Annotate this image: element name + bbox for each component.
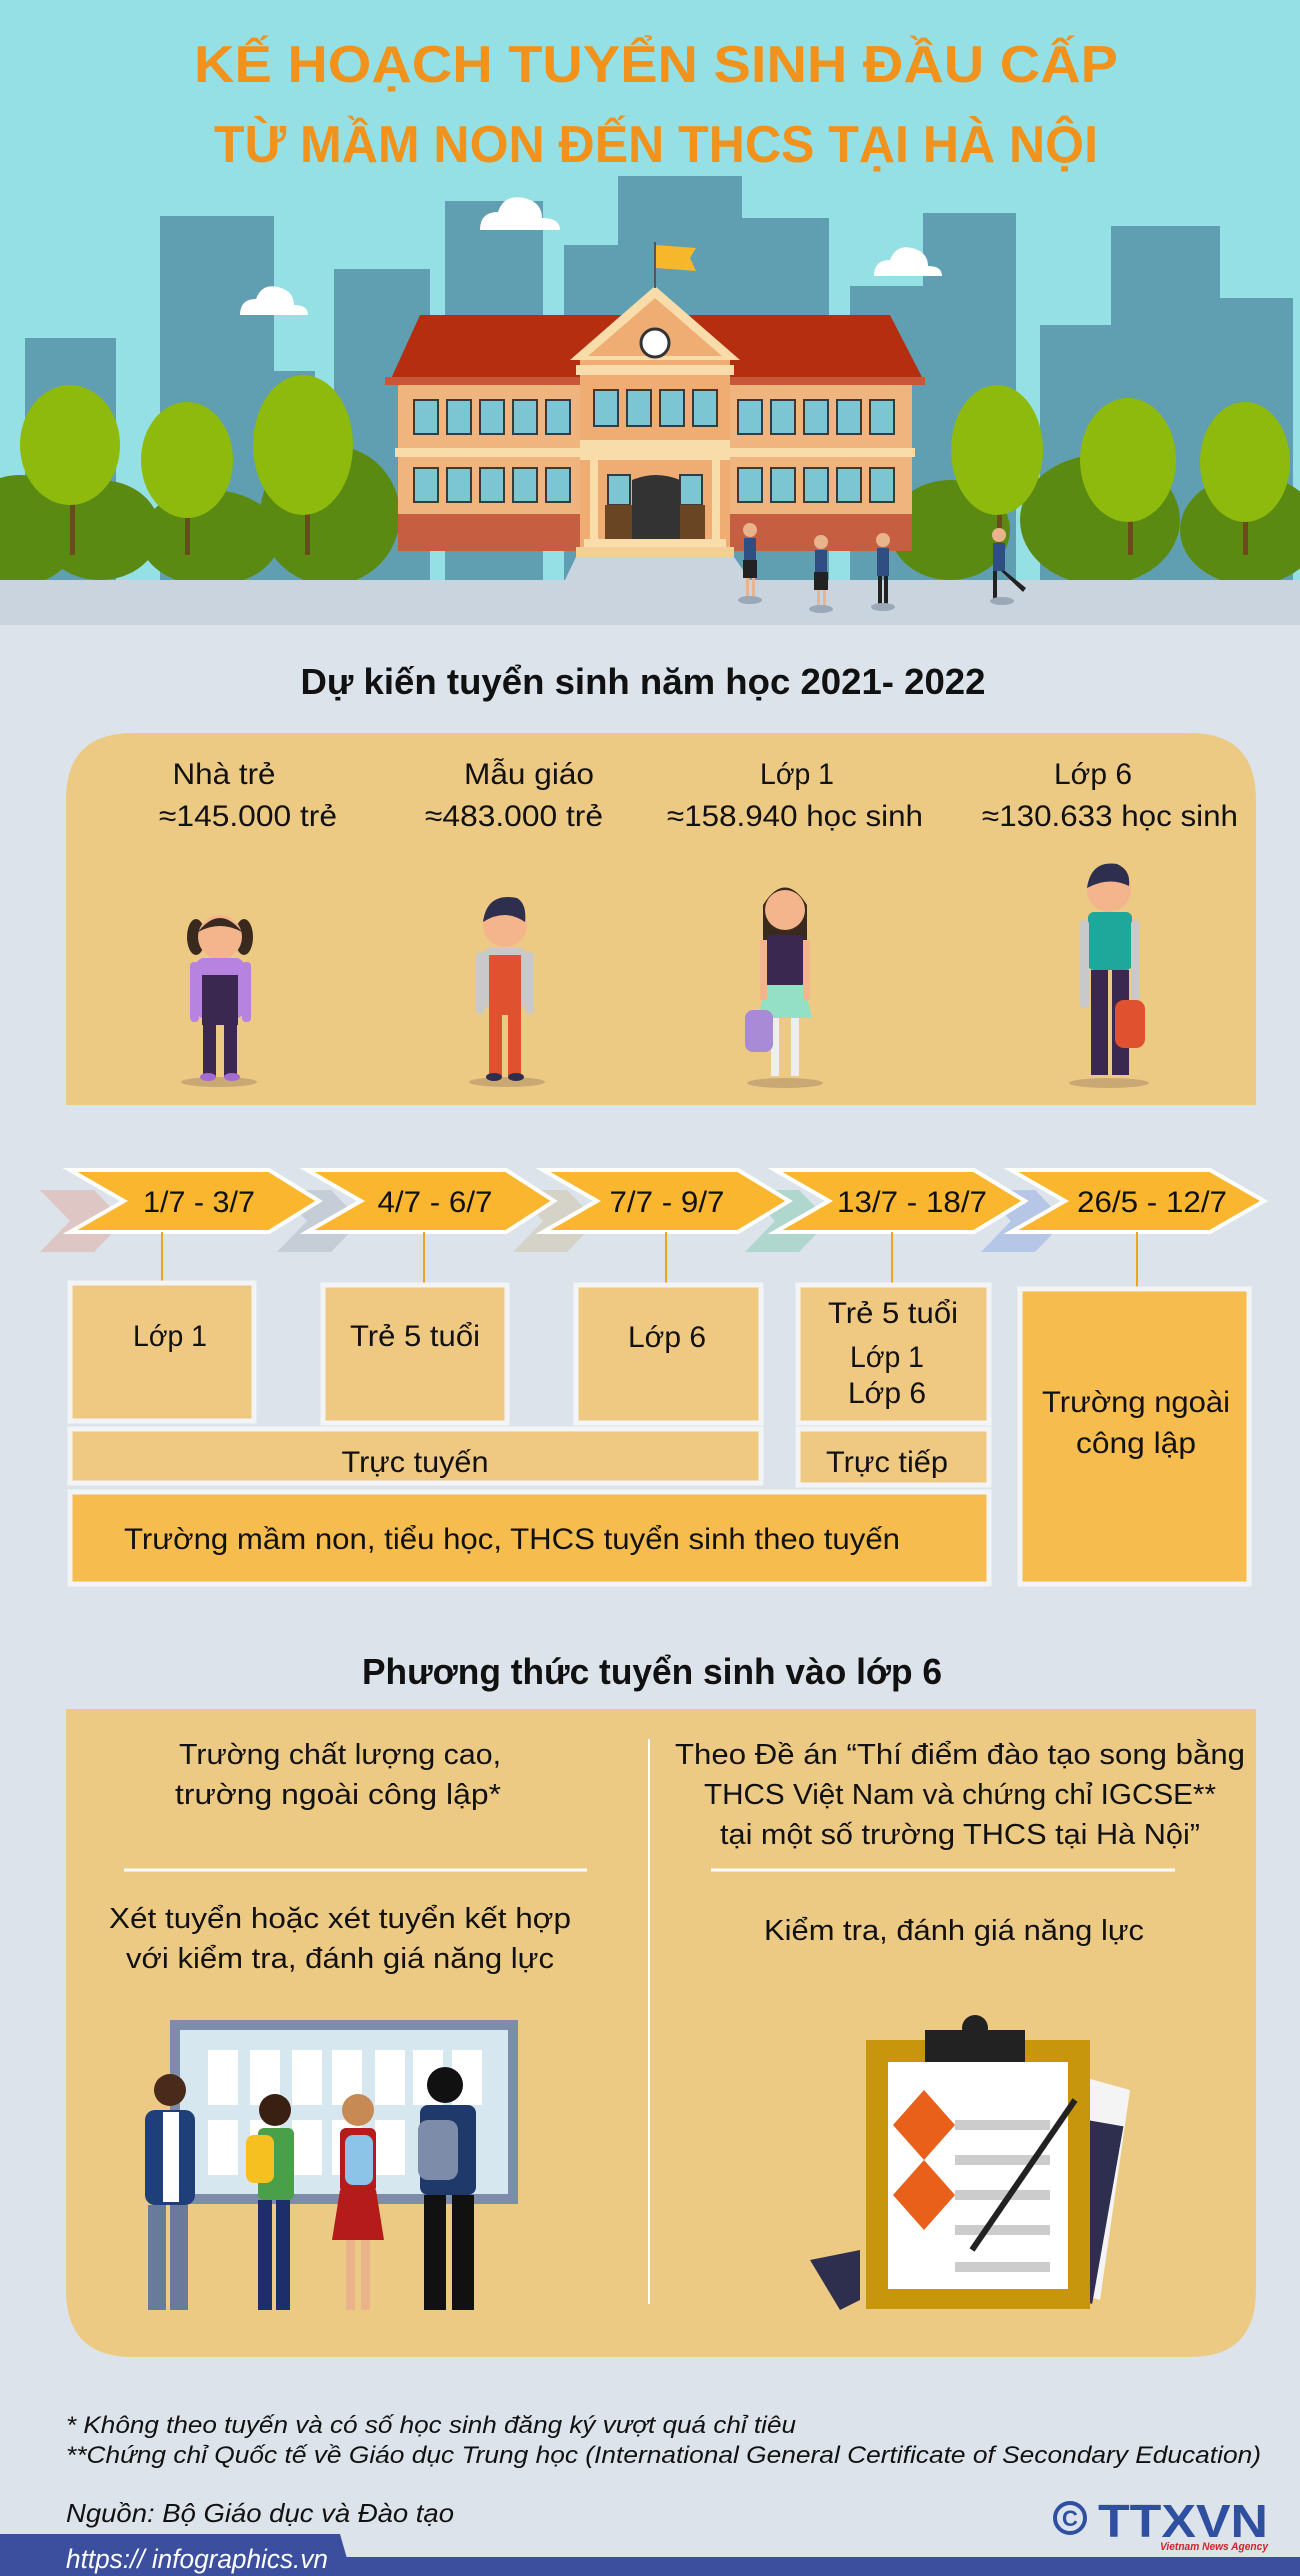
header scene — [0, 0, 1300, 625]
box labels: Lớp 6 — [848, 1377, 926, 1410]
trees right — [890, 385, 1300, 585]
column: Lớp 6: ≈130.633 học sinh — [982, 800, 1238, 833]
footer bar: https:// infographics.vn — [66, 2544, 328, 2574]
column: Lớp 6 — [982, 758, 1238, 833]
right column text: Theo Đề án “Thí điểm đào tạo song bằng — [675, 1738, 1245, 1771]
icon: toddler girl — [181, 915, 257, 1087]
icon: kindergarten boy — [469, 897, 545, 1087]
footnotes: **Chứng chỉ Quốc tế về Giáo dục Trung học (International General Certificate of Secondary Education) — [66, 2442, 1261, 2469]
box labels — [124, 1297, 1230, 1556]
date labels: 26/5 - 12/7 — [1077, 1186, 1227, 1219]
column: Mẫu giáo: ≈483.000 trẻ — [425, 800, 603, 833]
panel: admission methods — [66, 1709, 1256, 2357]
column: Lớp 6: Lớp 6 — [1054, 758, 1132, 791]
box labels: công lập — [1076, 1427, 1196, 1460]
right column text — [675, 1738, 1245, 1947]
small students — [738, 523, 1026, 613]
column: Nhà trẻ: Nhà trẻ — [172, 758, 276, 791]
heading: expected enrollment: Dự kiến tuyển sinh năm học 2021- 2022 — [300, 661, 986, 702]
trees left — [0, 375, 400, 586]
panel: enrollment figures — [66, 733, 1256, 1105]
clouds — [240, 197, 942, 315]
logo: TTXVN — [1055, 2495, 1269, 2553]
city buildings — [25, 176, 1293, 580]
box labels: Trẻ 5 tuổi — [350, 1320, 480, 1353]
schedule boxes — [70, 1283, 1249, 1584]
column: Lớp 1: ≈158.940 học sinh — [667, 800, 923, 833]
box labels: Trực tiếp — [826, 1446, 948, 1479]
icon: teenage boy — [1069, 864, 1149, 1088]
left column text: trường ngoài công lập* — [175, 1779, 501, 1811]
left column text — [109, 1739, 587, 1975]
illustration: clipboard test — [810, 2015, 1130, 2310]
illustration: students at notice board — [145, 2020, 518, 2310]
column: Mẫu giáo — [425, 758, 603, 833]
date labels — [143, 1186, 1227, 1219]
column: Lớp 1 — [667, 758, 923, 833]
title: KẾ HOẠCH TUYỂN SINH ĐẦU CẤP — [194, 35, 1118, 94]
left column text: Trường chất lượng cao, — [179, 1739, 501, 1771]
box labels: Lớp 1 — [133, 1320, 207, 1353]
box labels: Trẻ 5 tuổi — [828, 1297, 958, 1330]
box labels: Trực tuyến — [342, 1446, 488, 1479]
footnotes: * Không theo tuyến và có số học sinh đăng ký vượt quá chỉ tiêu — [66, 2412, 796, 2439]
title — [194, 35, 1118, 174]
column: Lớp 1: Lớp 1 — [760, 758, 834, 791]
right column text: tại một số trường THCS tại Hà Nội” — [720, 1819, 1200, 1851]
source: Nguồn: Bộ Giáo dục và Đào tạo — [66, 2498, 454, 2528]
icon: schoolgirl — [745, 888, 823, 1088]
column: Nhà trẻ: ≈145.000 trẻ — [159, 800, 337, 833]
date labels: 1/7 - 3/7 — [143, 1186, 255, 1219]
column: Mẫu giáo: Mẫu giáo — [464, 758, 594, 791]
right column text: THCS Việt Nam và chứng chỉ IGCSE** — [704, 1779, 1216, 1811]
ground — [0, 580, 1300, 625]
date labels: 4/7 - 6/7 — [378, 1186, 492, 1219]
logo: TTXVN: TTXVN — [1098, 2495, 1268, 2547]
column: Nhà trẻ — [159, 758, 337, 833]
footer bar — [0, 2534, 1300, 2576]
logo: TTXVN: Vietnam News Agency — [1160, 2541, 1269, 2553]
connector lines — [162, 1232, 1137, 1287]
date labels: 7/7 - 9/7 — [610, 1186, 724, 1219]
right column text: Kiểm tra, đánh giá năng lực — [764, 1915, 1144, 1947]
box labels: Lớp 6 — [628, 1321, 706, 1354]
left column text: với kiểm tra, đánh giá năng lực — [126, 1943, 554, 1975]
box labels: Trường mầm non, tiểu học, THCS tuyển sinh theo tuyến — [124, 1523, 900, 1556]
date labels: 13/7 - 18/7 — [837, 1186, 987, 1219]
footnotes — [66, 2412, 1261, 2469]
timeline arrows — [40, 1170, 1264, 1287]
box labels: Lớp 1 — [850, 1341, 924, 1374]
box labels: Trường ngoài — [1042, 1386, 1230, 1419]
heading: grade 6 admission methods: Phương thức tuyển sinh vào lớp 6 — [362, 1651, 942, 1692]
school building — [385, 242, 925, 557]
logo: TTXVN: C — [1062, 2506, 1078, 2531]
left column text: Xét tuyển hoặc xét tuyển kết hợp — [109, 1903, 571, 1935]
title: TỪ MẦM NON ĐẾN THCS TẠI HÀ NỘI — [214, 115, 1098, 174]
